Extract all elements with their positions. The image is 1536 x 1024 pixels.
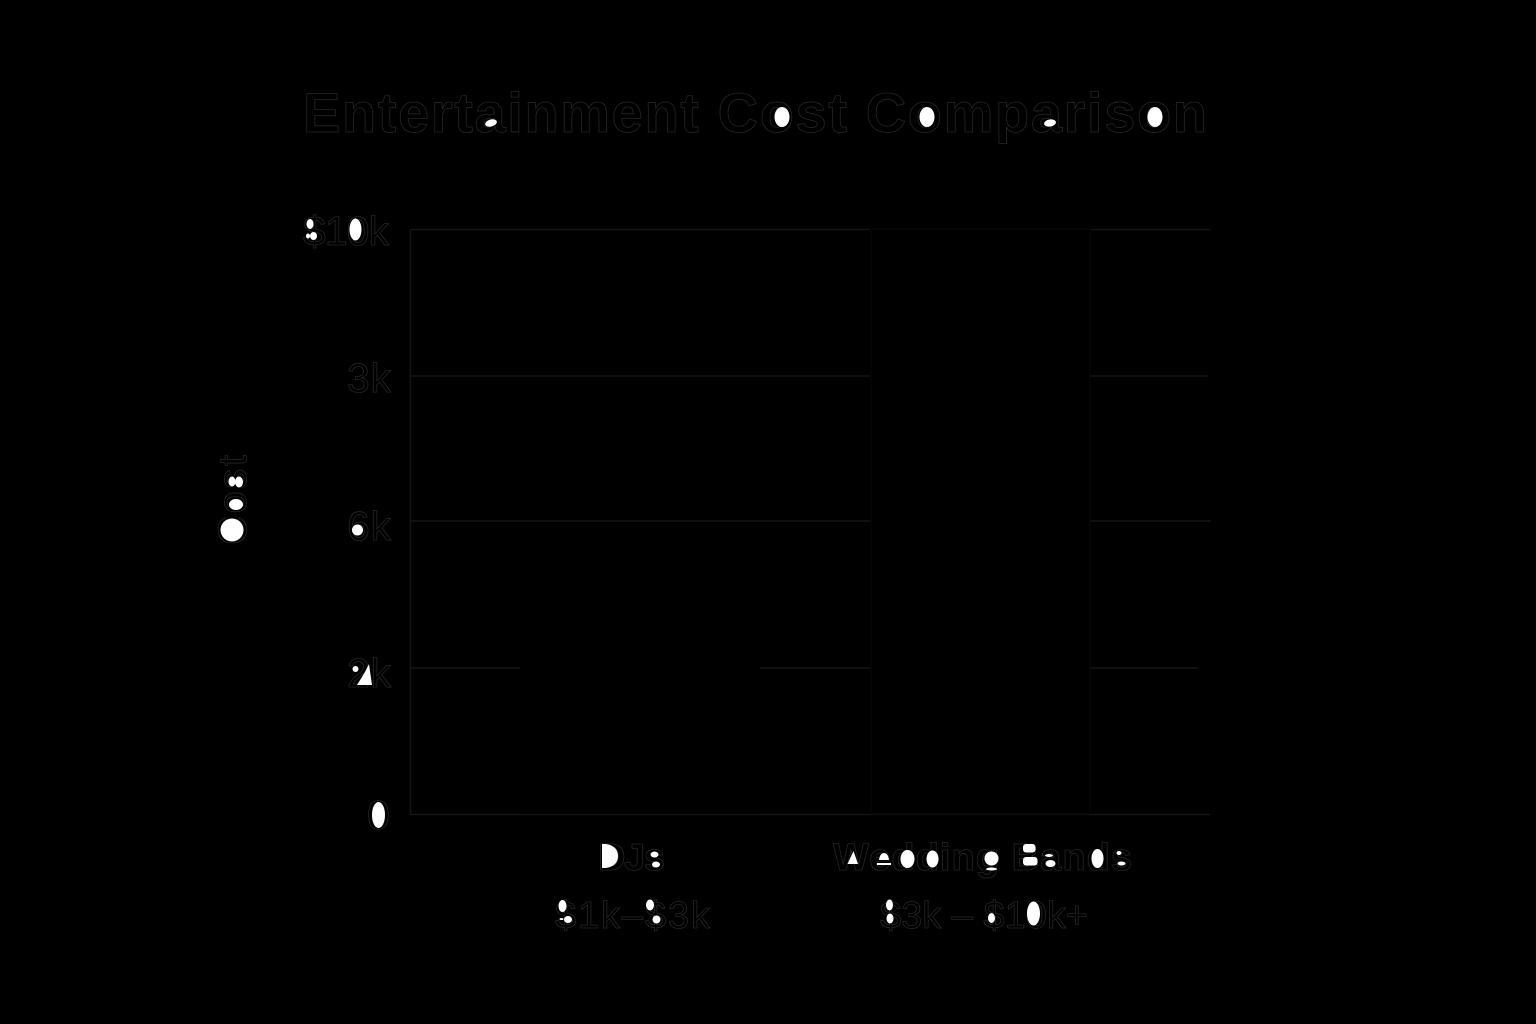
title: Entertainment Cost Comparison	[303, 81, 1207, 144]
y axis title: Cost	[211, 455, 255, 545]
bar: wedding bands	[871, 229, 1090, 814]
y tick: 3k: 3k	[347, 355, 392, 401]
price label: Wedding Bands: $3k – $10k+	[880, 895, 1088, 937]
bar chart	[410, 229, 1211, 814]
y tick: 0: 0	[367, 792, 390, 838]
y tick: $10k: $10k	[303, 208, 390, 254]
price label: DJs: $1k–$3k	[555, 895, 711, 937]
bar: DJs	[520, 668, 760, 814]
y tick: 6k: 6k	[347, 503, 392, 549]
category label: Wedding Bands: Wedding Bands	[833, 837, 1132, 879]
chart axes	[410, 229, 1210, 814]
category label: DJs: DJs	[598, 837, 665, 879]
y tick: 2k: 2k	[347, 650, 392, 696]
chart gridlines	[410, 230, 1211, 668]
